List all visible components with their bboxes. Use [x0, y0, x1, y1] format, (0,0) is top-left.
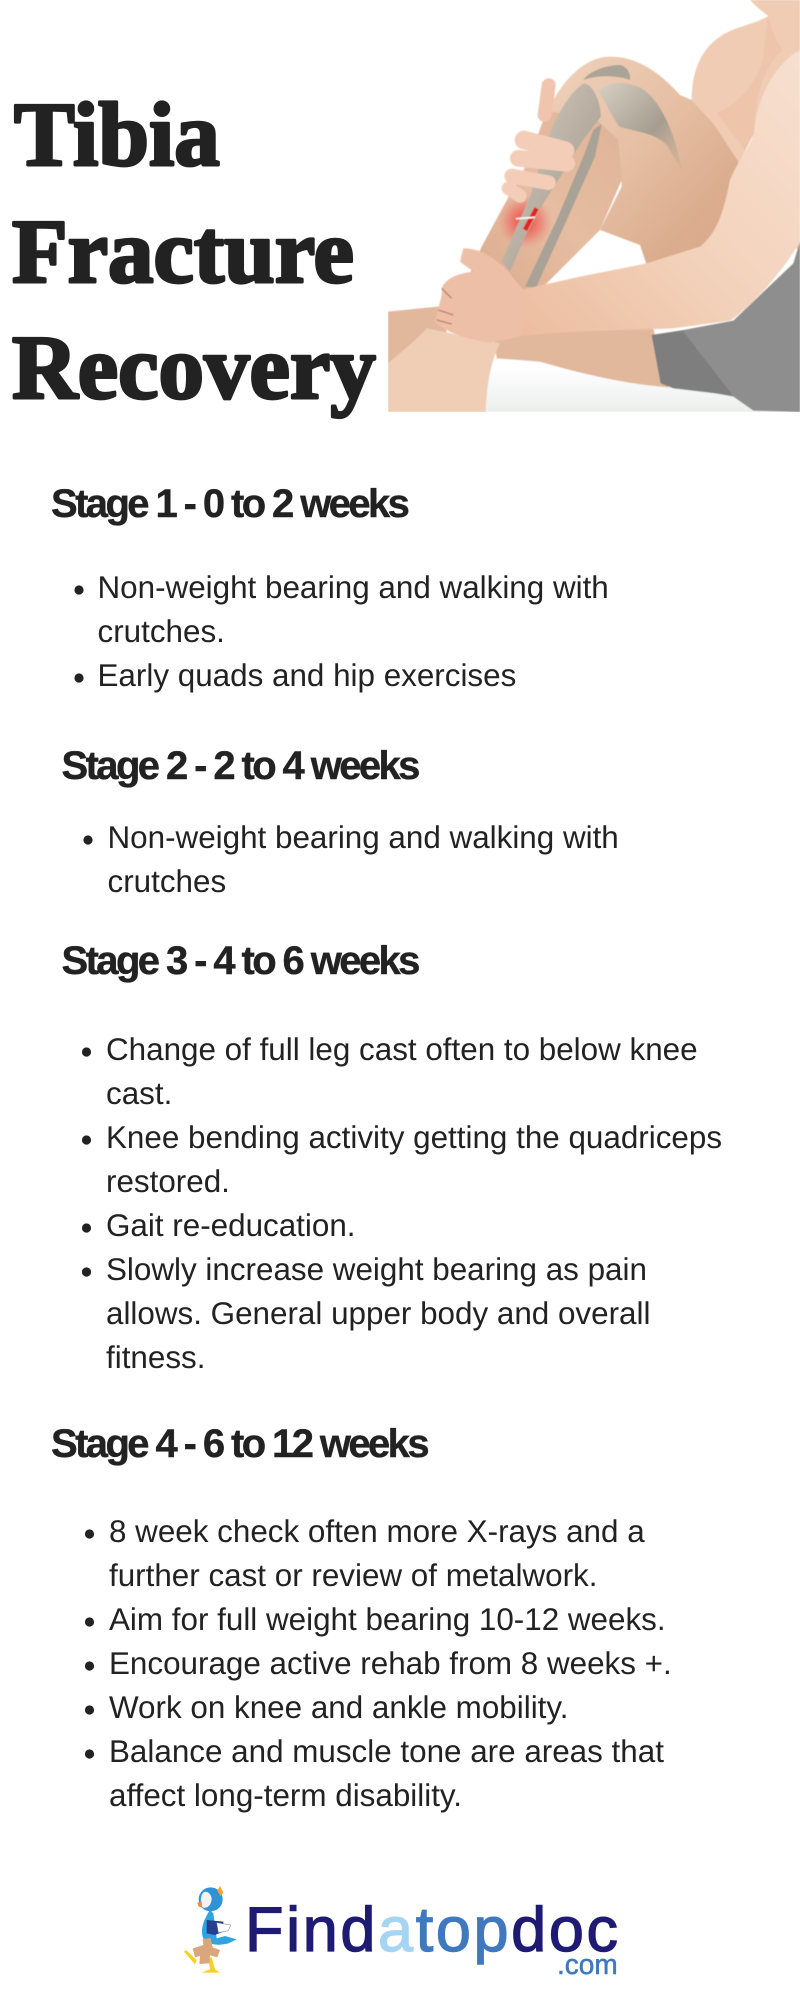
list: stage 2: Non-weight bearing and walking with — [108, 820, 619, 855]
photo: seated man holding leg with tibia fracture — [388, 0, 800, 412]
list: stage 3: Change of full leg cast often to below knee — [106, 1032, 698, 1067]
heading: stage 1: Stage 1 - 0 to 2 weeks — [51, 482, 409, 526]
wordmark suffix: .com — [557, 1949, 618, 1980]
list: stage 4: Encourage active rehab from 8 weeks +. — [109, 1646, 672, 1681]
thumb — [545, 85, 549, 115]
lying leg behind arm — [523, 275, 620, 300]
logo: Findatopdoc — [184, 1886, 618, 1980]
torso and far shoulder — [692, 0, 800, 253]
list: stage 4 — [85, 1514, 672, 1813]
list: stage 3 — [82, 1032, 722, 1375]
list: stage 3: allows. General upper body and overall — [106, 1296, 650, 1331]
lower hand — [435, 248, 525, 343]
list: stage 4: Balance and muscle tone are areas that — [109, 1734, 664, 1769]
foot — [388, 328, 500, 412]
list: stage 3: Slowly increase weight bearing as pain — [106, 1252, 647, 1287]
list: stage 4: Work on knee and ankle mobility. — [109, 1690, 568, 1725]
list: stage 4: further cast or review of metalwork. — [109, 1558, 597, 1593]
list: stage 4: Aim for full weight bearing 10-12 weeks. — [109, 1602, 666, 1637]
list: stage 4: affect long-term disability. — [109, 1778, 462, 1813]
list: stage 4: 8 week check often more X-rays and a — [109, 1514, 645, 1549]
heading: stage 2: Stage 2 - 2 to 4 weeks — [62, 744, 419, 788]
title: Tibia — [14, 84, 220, 185]
shorts — [652, 242, 800, 412]
heading: stage 4: Stage 4 - 6 to 12 weeks — [51, 1422, 428, 1466]
heading: stage 3: Stage 3 - 4 to 6 weeks — [62, 939, 419, 983]
panel: stage 1 — [51, 482, 609, 693]
list: stage 3: Gait re-education. — [106, 1208, 356, 1243]
list: stage 3: cast. — [106, 1076, 172, 1111]
list: stage 3: restored. — [106, 1164, 230, 1199]
bent shin — [470, 112, 622, 293]
icon: duck mascot with bandage — [184, 1886, 237, 1973]
title: Fracture — [12, 201, 354, 302]
title: Recovery — [12, 317, 376, 418]
knee bones — [502, 65, 682, 287]
armpit gap — [744, 136, 753, 152]
lower hand finger creases — [437, 288, 453, 324]
neck and chest shadow — [718, 22, 782, 148]
fracture glow — [500, 198, 550, 246]
panel: stage 4 — [51, 1422, 672, 1813]
panel: stage 2 — [62, 744, 619, 899]
upper hand fingers — [508, 140, 567, 196]
list: stage 3: fitness. — [106, 1340, 205, 1375]
list: stage 2: crutches — [108, 864, 226, 899]
list: stage 2 — [83, 820, 619, 899]
floor — [486, 384, 771, 412]
panel: stage 3 — [62, 939, 722, 1375]
lying leg — [388, 306, 668, 387]
list: stage 1: Early quads and hip exercises — [98, 658, 516, 693]
list: stage 1 — [74, 570, 609, 693]
title — [12, 84, 376, 418]
list: stage 3: Knee bending activity getting the quadriceps — [106, 1120, 722, 1155]
bent thigh — [547, 57, 738, 265]
list: stage 1: Non-weight bearing and walking with — [98, 570, 609, 605]
wordmark: Findatopdoc — [245, 1895, 618, 1965]
list: stage 1: crutches. — [98, 614, 225, 649]
arm — [520, 50, 800, 336]
